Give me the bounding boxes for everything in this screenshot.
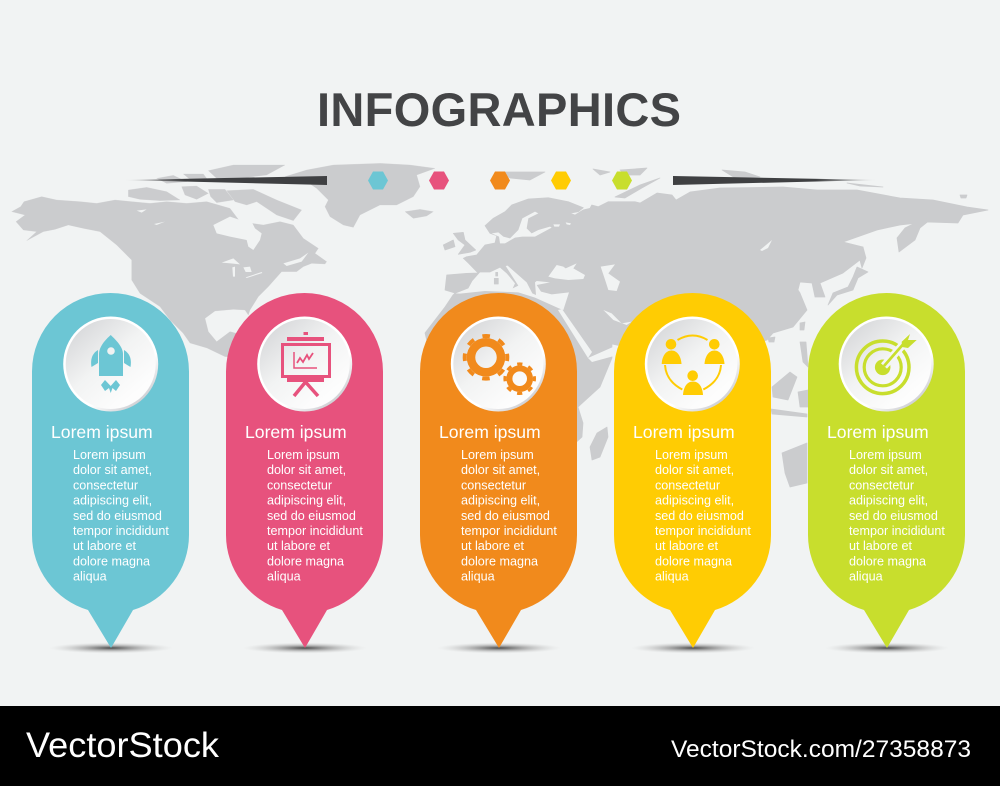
text block: tempor incididunt <box>849 524 945 538</box>
text block: Lorem ipsum <box>73 448 146 462</box>
heading: Lorem ipsum <box>245 422 347 442</box>
text block: consectetur <box>461 478 526 492</box>
text block: dolore magna <box>461 554 538 568</box>
heading: Lorem ipsum <box>633 422 735 442</box>
text block: adipiscing elit, <box>73 494 152 508</box>
text block: ut labore et <box>267 539 331 553</box>
text block: dolor sit amet, <box>73 463 152 477</box>
text block: ut labore et <box>849 539 913 553</box>
text block: dolore magna <box>267 554 344 568</box>
text block: sed do eiusmod <box>73 509 162 523</box>
map: islands <box>443 168 967 487</box>
text block: tempor incididunt <box>655 524 751 538</box>
title: INFOGRAPHICS <box>317 83 681 136</box>
heading: Lorem ipsum <box>827 422 929 442</box>
text block: sed do eiusmod <box>461 509 550 523</box>
map: Eurasia and Africa <box>425 187 988 520</box>
icon: presentation board <box>282 332 330 396</box>
watermark url: VectorStock.com/27358873 <box>671 736 971 763</box>
text block: consectetur <box>655 478 720 492</box>
panel: pin 1 <box>32 293 189 654</box>
text block: aliqua <box>267 570 301 584</box>
text block: dolor sit amet, <box>655 463 734 477</box>
world map <box>12 163 988 520</box>
text block: sed do eiusmod <box>267 509 356 523</box>
icon: gears <box>465 336 534 394</box>
icon: target with arrow <box>856 334 917 394</box>
watermark logo text: VectorStock <box>26 726 220 765</box>
decorative wedge: left <box>124 176 327 185</box>
decorative wedge: right <box>673 176 877 185</box>
text block: consectetur <box>849 478 914 492</box>
text block: adipiscing elit, <box>655 494 734 508</box>
text block: adipiscing elit, <box>267 494 346 508</box>
panel: pin 2 <box>226 293 383 654</box>
text block: Lorem ipsum <box>655 448 728 462</box>
text block: dolore magna <box>73 554 150 568</box>
text block: tempor incididunt <box>267 524 363 538</box>
text block: dolor sit amet, <box>461 463 540 477</box>
text block: Lorem ipsum <box>461 448 534 462</box>
text block <box>461 448 557 584</box>
text block: dolore magna <box>655 554 732 568</box>
panel: pin 5 <box>808 293 965 654</box>
text block <box>655 448 751 584</box>
text block: sed do eiusmod <box>655 509 744 523</box>
text block: Lorem ipsum <box>267 448 340 462</box>
footer watermark bar <box>0 706 1000 786</box>
text block: ut labore et <box>73 539 137 553</box>
text block: consectetur <box>267 478 332 492</box>
text block: sed do eiusmod <box>849 509 938 523</box>
panel: pin 4 <box>614 293 771 654</box>
text block: aliqua <box>655 570 689 584</box>
text block: dolor sit amet, <box>267 463 346 477</box>
text block: tempor incididunt <box>73 524 169 538</box>
text block <box>849 448 945 584</box>
text block: adipiscing elit, <box>461 494 540 508</box>
hexagon row <box>368 172 632 190</box>
text block: aliqua <box>849 570 883 584</box>
text block: dolore magna <box>849 554 926 568</box>
text block: adipiscing elit, <box>849 494 928 508</box>
icon: rocket <box>91 335 131 393</box>
text block: Lorem ipsum <box>849 448 922 462</box>
map: Mediterranean islands <box>494 272 498 284</box>
icon: team circle <box>662 336 724 395</box>
text block: tempor incididunt <box>461 524 557 538</box>
text block: consectetur <box>73 478 138 492</box>
panel: pin 3 <box>420 293 577 654</box>
text block: dolor sit amet, <box>849 463 928 477</box>
heading: Lorem ipsum <box>51 422 153 442</box>
heading: Lorem ipsum <box>439 422 541 442</box>
map: North America and Greenland <box>12 163 435 357</box>
text block <box>73 448 169 584</box>
text block <box>267 448 363 584</box>
map: seas and lakes <box>456 212 772 362</box>
text block: aliqua <box>461 570 495 584</box>
text block: aliqua <box>73 570 107 584</box>
text block: ut labore et <box>655 539 719 553</box>
text block: ut labore et <box>461 539 525 553</box>
